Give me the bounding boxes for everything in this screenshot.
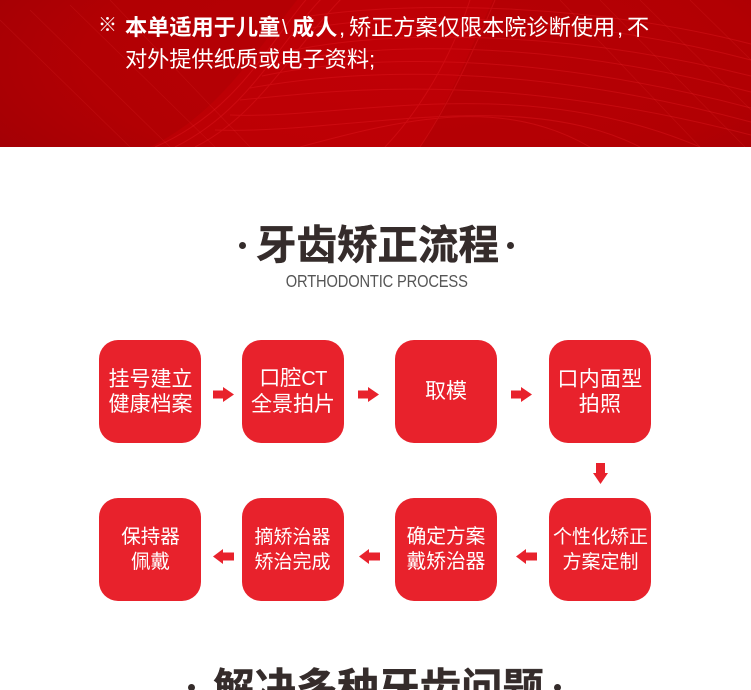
step 6 [395, 498, 497, 601]
panel: red notice banner [0, 0, 751, 147]
arrow 7 to 8 [213, 549, 234, 564]
arrow 1 to 2 [213, 387, 234, 402]
heading: dental problems title [188, 666, 561, 690]
notice line 1: 矫正方案仅限本院诊断使用 [349, 15, 615, 40]
title dot left [239, 242, 246, 249]
arrow 4 to 5 [593, 463, 608, 484]
title text: 牙齿矫正流程 [256, 222, 499, 268]
step 5: 方案定制 [562, 552, 638, 572]
flow chart: orthodontic steps [99, 340, 651, 601]
step 1 [99, 340, 201, 443]
step 4 [549, 340, 651, 443]
step 2: 全景拍片 [251, 393, 335, 416]
step 8: 保持器 [121, 526, 180, 548]
step 5: 个性化矫正 [553, 526, 648, 548]
step 3: 取模 [425, 380, 467, 403]
step 6: 戴矫治器 [407, 550, 485, 572]
step 7 [242, 498, 344, 601]
step 6: 确定方案 [407, 526, 485, 548]
step 2 [242, 340, 344, 443]
step 4: 口内面型 [557, 368, 643, 390]
title dot left [188, 684, 195, 690]
arrow 2 to 3 [358, 387, 379, 402]
subtitle: ORTHODONTIC PROCESS [286, 271, 468, 291]
title dot right [554, 684, 561, 690]
notice line 1: , [339, 15, 345, 40]
notice line 1: 不 [627, 15, 649, 40]
step 2: 口腔CT [259, 367, 327, 390]
step 7: 矫治完成 [254, 552, 330, 572]
arrow 5 to 6 [516, 549, 537, 564]
notice line 1: \ [282, 17, 288, 39]
notice line 1: 本单适用于儿童 [125, 15, 280, 40]
step 4: 拍照 [579, 392, 621, 416]
arrow 6 to 7 [359, 549, 380, 564]
step 3 [395, 340, 497, 443]
heading: process title [239, 222, 514, 268]
notice line 2: 对外提供纸质或电子资料; [125, 47, 375, 72]
wave line pattern [0, 0, 751, 147]
step 1: 挂号建立 [108, 368, 192, 390]
notice line 1: , [617, 15, 623, 40]
step 7: 摘矫治器 [254, 526, 330, 548]
step 5 [549, 498, 651, 601]
notice text [98, 15, 649, 72]
title dot right [507, 242, 514, 249]
step 8: 佩戴 [131, 550, 170, 572]
step 1: 健康档案 [108, 392, 192, 416]
notice line 1 [125, 15, 649, 40]
notice line 1: 成人 [292, 15, 338, 40]
reference mark: ※ [98, 15, 117, 36]
arrow 3 to 4 [511, 387, 532, 402]
step 8 [99, 498, 201, 601]
